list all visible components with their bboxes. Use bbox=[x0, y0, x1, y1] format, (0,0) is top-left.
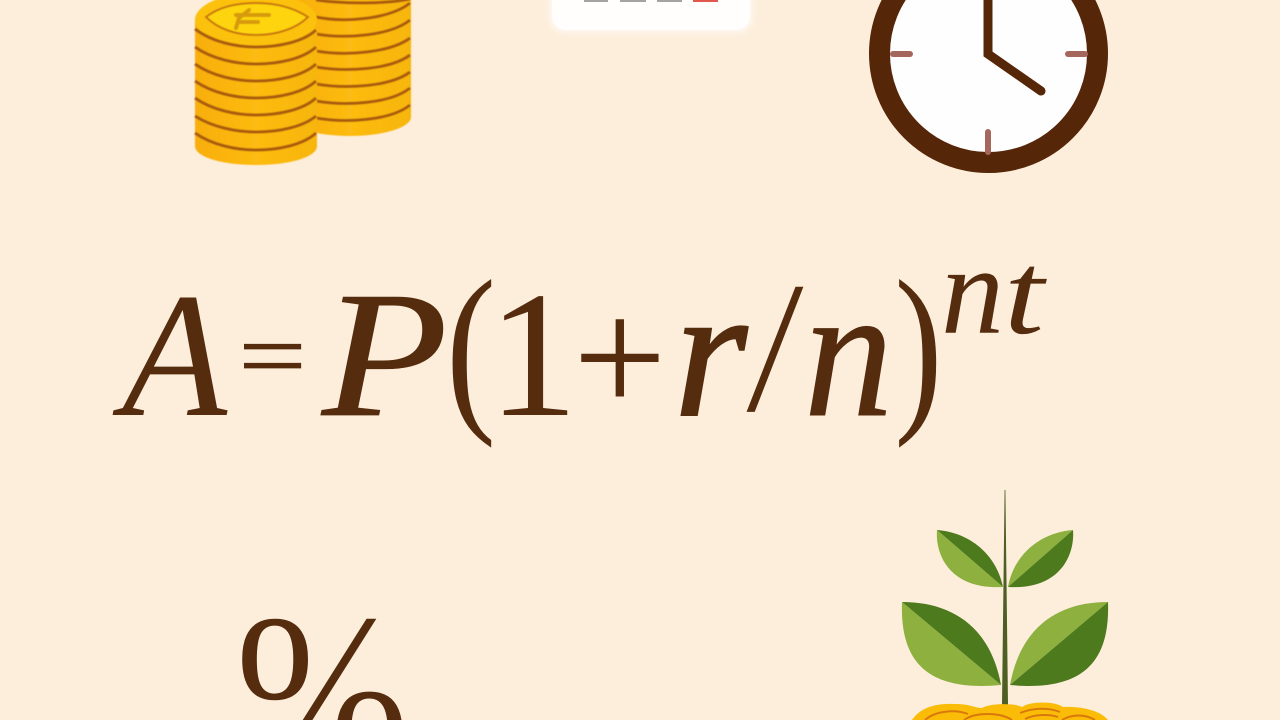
right coin stack bbox=[289, 0, 411, 136]
icon: clock bbox=[880, 0, 1098, 162]
coin pile bbox=[912, 702, 1108, 720]
stem bbox=[1002, 490, 1008, 705]
card bars bbox=[584, 0, 718, 2]
icon: plant growing from coins bbox=[902, 490, 1108, 720]
formula: A bbox=[112, 256, 228, 454]
formula: n bbox=[941, 222, 1004, 361]
formula: = bbox=[238, 304, 306, 408]
formula bbox=[112, 222, 1048, 456]
lower left leaf bbox=[902, 602, 1001, 686]
formula: r bbox=[674, 247, 748, 456]
formula: / bbox=[745, 243, 805, 453]
formula: 1 bbox=[488, 255, 578, 454]
clock hands bbox=[988, 0, 1041, 91]
lower right leaf bbox=[1010, 602, 1108, 686]
formula: P bbox=[321, 255, 448, 454]
clock tick marks bbox=[893, 54, 1085, 152]
formula: ( bbox=[446, 243, 496, 449]
formula: t bbox=[1004, 228, 1048, 359]
upper right leaf bbox=[1008, 530, 1073, 587]
card fragment bbox=[550, 0, 752, 32]
coin face with rupee mark bbox=[206, 3, 308, 35]
formula: n bbox=[804, 247, 893, 456]
upper left leaf bbox=[937, 530, 1003, 587]
formula: ) bbox=[894, 243, 942, 449]
left coin stack bbox=[195, 0, 317, 165]
formula: + bbox=[573, 265, 667, 449]
icon: stacks of coins bbox=[195, 0, 411, 165]
